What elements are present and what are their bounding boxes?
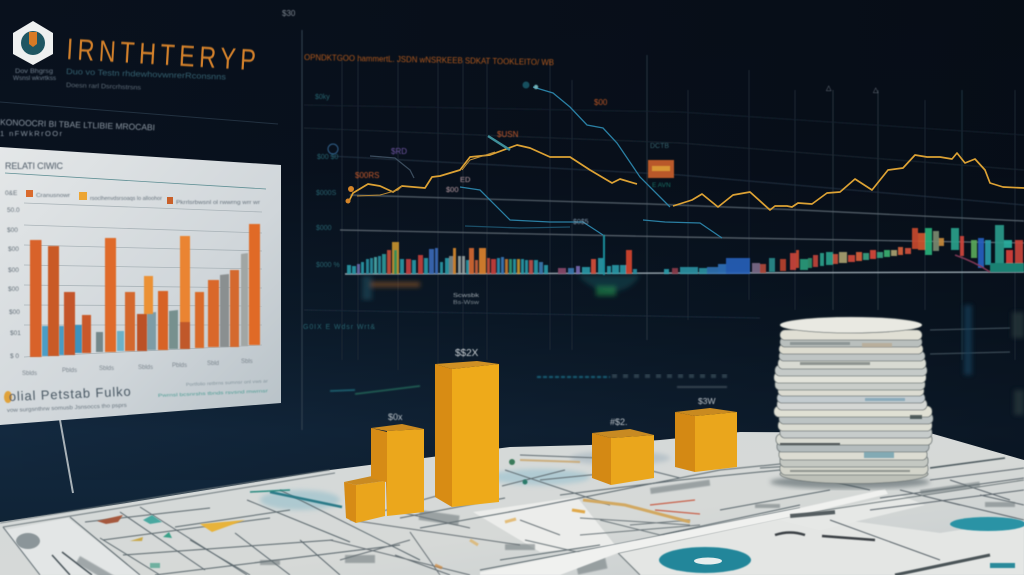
volume bars: left cluster bbox=[347, 242, 548, 274]
left axis labels bbox=[303, 94, 375, 331]
section caption: KONOOCRI BI TBAE LTLIBIE MROCABI bbox=[0, 117, 155, 132]
map network lines bbox=[0, 455, 1024, 575]
white blank areas bbox=[5, 495, 1024, 575]
x axis labels: Sblds bbox=[138, 365, 153, 371]
x axis labels: Sbls bbox=[241, 359, 253, 365]
value label: fifth bar: $3W bbox=[698, 396, 715, 406]
chart value labels: ED bbox=[460, 175, 471, 184]
blue line start marker bbox=[522, 82, 538, 89]
chart value labels: $0$5 bbox=[573, 219, 589, 226]
left axis labels: $00 $0 bbox=[317, 154, 339, 161]
grey map smudges bbox=[76, 480, 1015, 575]
y axis labels: $00 bbox=[7, 227, 18, 234]
small chart callout bbox=[648, 143, 674, 189]
panel footer notes: Portfolio retbrns sumnsr onl vws ar bbox=[186, 378, 269, 387]
faint lower labels: Bs-Wsw bbox=[453, 300, 479, 306]
coin stack bbox=[774, 317, 933, 484]
orange bars bbox=[30, 224, 260, 357]
y axis labels: $ 0 bbox=[10, 353, 19, 360]
teal disc left bbox=[659, 547, 751, 573]
teal disc right bbox=[950, 517, 1024, 531]
x axis labels: Sblds bbox=[22, 371, 37, 377]
value label: second bar: $0x bbox=[388, 412, 403, 422]
chart value labels: $00 bbox=[594, 98, 608, 107]
left axis labels: $000S bbox=[316, 190, 337, 197]
grid lines bbox=[5, 173, 266, 357]
map sheet bbox=[0, 432, 1024, 575]
3d bar: fifth bbox=[675, 408, 737, 472]
logo caption: Dov Bhgrsg bbox=[15, 69, 53, 75]
panel footer title: vow surgsnthrw somusb Jsnsoccs tho psprs bbox=[7, 403, 127, 414]
chart grid: horizontal lines bbox=[304, 105, 1024, 354]
faint lower series bbox=[330, 376, 730, 394]
glow under volume bars bbox=[362, 275, 640, 300]
y axis labels: 0&E bbox=[5, 190, 18, 197]
map notes bbox=[775, 510, 1015, 575]
y axis labels: $01 bbox=[10, 330, 21, 337]
teal disc centre bbox=[694, 558, 722, 564]
y axis labels: $00 bbox=[8, 267, 19, 274]
stand leg bbox=[60, 420, 73, 493]
coin shadow bbox=[770, 475, 930, 489]
top right axis marks bbox=[826, 85, 879, 94]
x axis labels: Pblds bbox=[62, 368, 77, 374]
x axis labels bbox=[22, 359, 253, 377]
divider under header bbox=[0, 102, 278, 124]
chart grid: vertical lines bbox=[302, 30, 1015, 430]
panel footer title: olial Petstab Fulko bbox=[8, 384, 131, 404]
legend: Pkrrlsrbwsnl ol rwwrng wrr wr bbox=[176, 200, 260, 206]
panel title: RELATI CIWIC bbox=[5, 161, 64, 171]
3d bar: small bbox=[344, 476, 385, 523]
3d bar: tallest bbox=[435, 361, 499, 507]
blue tint areas bbox=[260, 451, 670, 510]
top right axis marks: △ bbox=[873, 87, 879, 94]
left axis labels: $000 bbox=[316, 225, 332, 232]
x axis labels: Sblds bbox=[99, 366, 114, 372]
legend bbox=[26, 190, 260, 206]
subtitle text bbox=[66, 67, 226, 92]
chart value labels: $RD bbox=[391, 147, 407, 156]
panel footer notes: Pwrnsl bcsnrshs tbnds rsvsnd mwrnsr bbox=[158, 388, 269, 398]
left axis labels: $0ky bbox=[315, 94, 330, 101]
y axis labels: $00 bbox=[8, 246, 19, 253]
logo caption: Wsnsl wkvrtkss bbox=[13, 76, 56, 82]
panel footer notes bbox=[158, 378, 269, 398]
header strip of chart: OPNDKTGOO hammertL. JSDN wNSRKEEB SDKAT TOOKLEITO/ WB bbox=[304, 53, 554, 67]
logo caption bbox=[13, 69, 56, 82]
small chart callout: DCTB bbox=[650, 143, 669, 150]
subtitle text: Duo vo Testn rhdewhovwnrerRconsnns bbox=[66, 67, 226, 82]
y axis labels: $00 bbox=[9, 309, 20, 316]
faint lower labels: Scwsbk bbox=[453, 293, 479, 299]
y axis labels: 50.0 bbox=[7, 207, 20, 214]
left axis labels: $000 % bbox=[316, 262, 340, 269]
panel: bar chart board bbox=[0, 147, 281, 425]
chart value labels: $00RS bbox=[355, 171, 379, 180]
legend: Cranusnowr bbox=[36, 193, 70, 199]
subtitle text: Doesn rarl Dsrcrhstrsns bbox=[66, 82, 142, 92]
blue trend lines bbox=[370, 87, 722, 238]
top right axis marks: △ bbox=[826, 85, 832, 92]
yellow trend line bbox=[346, 136, 1024, 210]
chart value labels: $00 bbox=[446, 185, 459, 194]
value label: tallest bar: $$2X bbox=[455, 348, 479, 359]
y axis labels bbox=[5, 190, 21, 360]
map colour accents bbox=[16, 459, 700, 575]
far right dim blocks bbox=[964, 305, 1024, 415]
logo: hexagon bbox=[13, 21, 53, 65]
x axis labels: Pblds bbox=[172, 363, 187, 369]
blue and grey bars bbox=[42, 253, 248, 356]
panel footer title bbox=[4, 384, 131, 414]
left axis labels: G0IX E Wdsr Wrt& bbox=[303, 324, 375, 331]
section caption: 1 nFWkRrOOr bbox=[0, 129, 62, 138]
axis caption top: $30 bbox=[282, 9, 296, 18]
chart value labels bbox=[328, 98, 608, 226]
3d bar: fourth bbox=[592, 429, 654, 485]
legend: rsoclhenvdsrsoaqs lo alloohor bbox=[90, 196, 162, 202]
x axis labels: Sbld bbox=[207, 361, 219, 367]
y axis labels: $00 bbox=[8, 286, 19, 293]
value label: fourth bar: #$2. bbox=[610, 417, 628, 427]
white fold sheet bbox=[480, 489, 888, 575]
title: IRNTHTERYP bbox=[66, 32, 257, 77]
3d bar: second bbox=[371, 424, 424, 516]
faint lower labels bbox=[453, 293, 479, 306]
volume bars: right cluster bbox=[664, 225, 1024, 274]
small chart callout: E AVN bbox=[652, 182, 671, 189]
coin stack accents bbox=[780, 342, 922, 472]
volume bars: middle cluster bbox=[558, 235, 637, 275]
chart value labels: $USN bbox=[497, 130, 519, 139]
